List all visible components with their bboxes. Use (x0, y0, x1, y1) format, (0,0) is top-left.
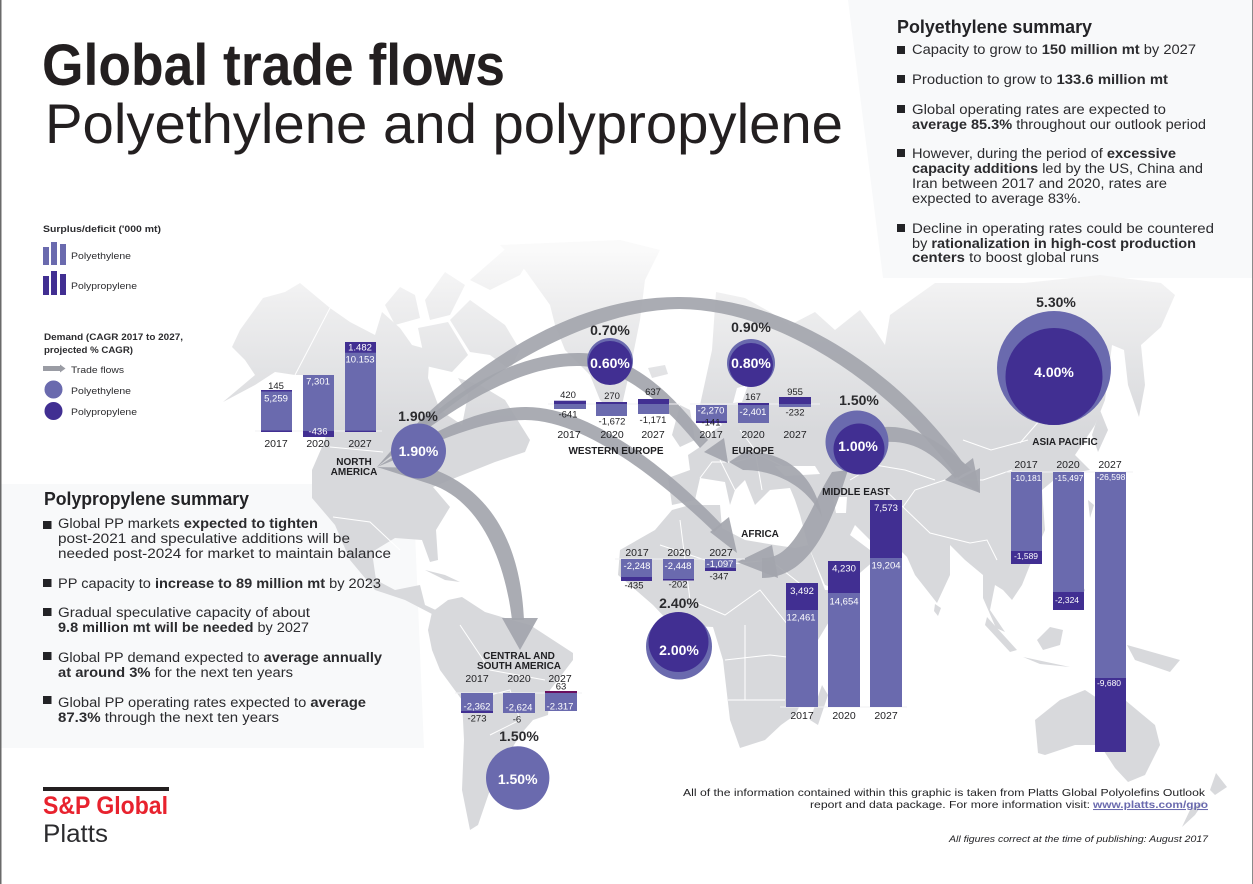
legend: Polypropylene (71, 407, 137, 418)
panel: polyethylene summary: centers to boost global runs (912, 250, 1099, 265)
bar chart: Africa: 2020 (667, 547, 691, 559)
panel: polyethylene summary: by rationalization in high-cost production (912, 236, 1196, 251)
circle: Europe demand: 0.80% (731, 355, 771, 371)
bar chart: Central and South America: 2020 (507, 673, 531, 685)
circle: North America demand: 1.90% (399, 443, 439, 459)
bar chart: Western Europe: 2017 (557, 429, 581, 441)
title: Polyethylene and polypropylene (45, 92, 843, 155)
legend: Surplus/deficit ('000 mt) (43, 224, 161, 235)
circle: Middle East demand: 1.00% (838, 438, 878, 454)
bar chart: Central and South America: SOUTH AMERICA (477, 661, 561, 672)
panel: polypropylene summary: Global PP operating rates expected to average (58, 695, 367, 710)
source note: All of the information contained within this graphic is taken from Platts Global Polyolefins Outlook (683, 787, 1206, 799)
bar chart: Asia Pacific: 2027 (1098, 459, 1122, 471)
bar chart: Western Europe (548, 387, 680, 457)
bar chart: Europe: 2020 (741, 429, 765, 441)
circle: Europe demand: 0.90% (731, 319, 771, 335)
source note: report and data package. For more information visit: (810, 799, 1090, 811)
legend: projected % CAGR) (44, 345, 133, 356)
panel: polypropylene summary: 9.8 million mt will be needed by 2027 (58, 620, 309, 635)
bar chart: Middle East: 2020 (832, 710, 856, 722)
bar chart: North America: AMERICA (331, 467, 377, 478)
bar chart: Africa: -347 (709, 572, 729, 582)
legend (43, 224, 183, 420)
bar chart: Africa: -2,448 (665, 561, 691, 572)
bar chart: Asia Pacific: -26,598 (1097, 472, 1126, 482)
circle: Western Europe demand: 0.70% (590, 322, 630, 338)
bar chart: Europe: -2,270 (698, 406, 724, 416)
circle: North America demand (391, 408, 446, 478)
bar chart: Europe: EUROPE (732, 446, 774, 457)
bar chart: Asia Pacific: -9,680 (1097, 678, 1121, 688)
logo: S&P Global Platts (43, 787, 169, 848)
world map (223, 240, 1227, 830)
legend: Polyethylene (71, 386, 131, 397)
bar chart: Middle East: 3,492 (790, 586, 814, 597)
bar chart: Central and South America: -273 (467, 714, 487, 724)
bar chart: North America: -436 (308, 426, 328, 438)
bar chart: Western Europe: 2020 (600, 429, 624, 441)
bar chart: Middle East: 2027 (874, 710, 898, 722)
circle: Middle East demand (826, 392, 888, 474)
bar chart: Europe (690, 387, 820, 457)
bar chart: Middle East: 7,573 (874, 503, 898, 514)
circle: Central and South America demand: 1.50% (499, 728, 539, 744)
bar chart: Middle East: 12,461 (786, 612, 816, 624)
circle: Central and South America demand: 1.50% (498, 771, 538, 787)
bar chart: Western Europe: -1,672 (599, 416, 625, 428)
panel: polypropylene summary: Global PP markets expected to tighten (58, 516, 318, 531)
bar chart: Central and South America: -2,362 (464, 702, 490, 712)
bar chart: North America: NORTH (336, 457, 372, 468)
panel: polypropylene summary: Gradual speculative capacity of about (58, 605, 310, 620)
bar chart: North America: 5,259 (264, 394, 288, 404)
panel: polyethylene summary: expected to average 83%. (912, 191, 1081, 206)
bar chart: Middle East: 14,654 (829, 596, 859, 608)
panel: polypropylene summary: PP capacity to increase to 89 million mt by 2023 (58, 576, 381, 591)
bar chart: Asia Pacific: ASIA PACIFIC (1032, 437, 1098, 448)
bar chart: Central and South America: -2.317 (547, 702, 573, 712)
bar chart: Asia Pacific: 2017 (1014, 459, 1038, 471)
trade flow arrows (377, 297, 980, 650)
panel: polypropylene summary: Global PP demand expected to average annually (58, 650, 383, 665)
panel: polyethylene summary: Polyethylene summary (897, 17, 1092, 37)
panel: polyethylene summary: average 85.3% throughout our outlook period (912, 117, 1206, 132)
bar chart: Europe: -232 (785, 408, 805, 418)
bar chart: Africa: -435 (624, 580, 644, 592)
bar chart: Asia Pacific: -1,589 (1014, 551, 1038, 561)
panel: polyethylene summary (897, 17, 1214, 265)
circle: North America demand: 1.90% (398, 408, 438, 424)
panel: polyethylene summary: Global operating rates are expected to (912, 102, 1166, 117)
circle: Asia Pacific demand: 4.00% (1034, 364, 1074, 380)
bar chart: Western Europe: -641 (558, 410, 578, 420)
bar chart: Central and South America: 2027 (548, 673, 572, 685)
legend: Polypropylene (71, 281, 137, 292)
bar chart: Western Europe: 637 (645, 387, 661, 398)
bar chart: North America: 145 (268, 381, 284, 392)
bar chart: Europe: -141 (701, 418, 721, 428)
circle: Central and South America demand (486, 728, 549, 810)
bar chart: Asia Pacific: 2020 (1056, 459, 1080, 471)
circle: Europe demand (727, 319, 775, 387)
logo: S&P Global Platts: Platts (43, 820, 108, 848)
bar chart: Western Europe: -1,171 (640, 415, 666, 426)
source note: All figures correct at the time of publishing: August 2017 (948, 834, 1209, 845)
bar chart: North America: 2020 (306, 438, 330, 450)
circle: Western Europe demand (587, 322, 633, 385)
bar chart: Africa: -2,248 (624, 561, 650, 572)
panel: polypropylene summary: needed post-2024 for market to maintain balance (58, 546, 391, 561)
panel background: polyethylene summary (848, 0, 1252, 278)
bar chart: Asia Pacific: -15,497 (1055, 473, 1084, 483)
bar chart: Western Europe: 2027 (641, 429, 665, 441)
bar chart: Europe: 955 (787, 387, 803, 398)
bar chart: Middle East: 4,230 (832, 564, 856, 574)
circle: Middle East demand: 1.50% (839, 392, 879, 408)
bar chart: Middle East: 19,204 (871, 560, 901, 572)
bar chart: Middle East: MIDDLE EAST (822, 487, 890, 498)
bar chart: Africa: -202 (668, 580, 688, 590)
bar chart: North America (255, 342, 382, 478)
bar chart: Europe: 167 (745, 392, 761, 403)
bar chart: North America: 10.153 (345, 354, 375, 366)
bar chart: North America: 1.482 (348, 342, 372, 354)
circle: Western Europe demand: 0.60% (590, 355, 630, 371)
bar chart: North America: 2017 (264, 438, 288, 450)
bar chart: Middle East: 2017 (790, 710, 814, 722)
panel: polyethylene summary: Production to grow to 133.6 million mt (912, 72, 1169, 87)
bar chart: Western Europe: 420 (560, 390, 576, 401)
panel: polyethylene summary: Iran between 2017 and 2020, rates are (912, 176, 1167, 191)
panel background: polypropylene summary (2, 484, 424, 748)
logo: S&P Global Platts: S&P Global (43, 792, 168, 820)
bar chart: Middle East (780, 487, 907, 722)
bar chart: Central and South America: CENTRAL AND (483, 651, 555, 662)
title (42, 33, 843, 155)
bar chart: Africa: AFRICA (741, 529, 779, 540)
panel: polypropylene summary (43, 489, 391, 725)
circle: Africa demand: 2.00% (659, 642, 699, 658)
panel: polyethylene summary: Decline in operating rates could be countered (912, 221, 1214, 236)
bar chart: Europe: 2027 (783, 429, 807, 441)
panel: polyethylene summary: However, during the period of excessive (912, 146, 1177, 161)
bar chart: Africa: 2017 (625, 547, 649, 559)
bar chart: Central and South America: 2017 (465, 673, 489, 685)
bar chart: Western Europe: 270 (604, 391, 620, 402)
bar chart: Africa (615, 529, 779, 592)
bar chart: Africa: 2027 (709, 547, 733, 559)
circle: Asia Pacific demand: 5.30% (1036, 294, 1076, 310)
title: Global trade flows (42, 33, 505, 98)
legend: Demand (CAGR 2017 to 2027, (44, 332, 183, 343)
panel: polyethylene summary: capacity additions led by the US, China and (912, 161, 1203, 176)
bar chart: North America: 2027 (348, 438, 372, 450)
circle: Africa demand (646, 595, 712, 680)
bar chart: Europe: -2,401 (740, 407, 766, 418)
bar chart: Central and South America: -6 (513, 714, 521, 726)
source note (683, 787, 1209, 845)
bar chart: Central and South America (455, 651, 582, 726)
bar chart: Europe: 2017 (699, 429, 723, 441)
bar chart: Asia Pacific: -2,324 (1055, 595, 1079, 605)
panel: polypropylene summary: 87.3% through the next ten years (58, 710, 279, 725)
panel: polypropylene summary: at around 3% for the next ten years (58, 665, 293, 680)
bar chart: Asia Pacific (1005, 437, 1133, 752)
panel: polypropylene summary: post-2021 and speculative additions will be (58, 531, 350, 546)
panel: polyethylene summary: Capacity to grow to 150 million mt by 2027 (912, 42, 1196, 57)
source note: www.platts.com/gpo (1092, 799, 1208, 811)
bar chart: North America: 7,301 (306, 376, 330, 388)
legend: Polyethylene (71, 251, 131, 262)
bar chart: Central and South America: -2,624 (506, 702, 532, 714)
bar chart: Asia Pacific: -10,181 (1013, 473, 1042, 483)
bar chart: Africa: -1,097 (707, 559, 733, 570)
legend: Trade flows (71, 365, 124, 376)
circle: Africa demand: 2.40% (659, 595, 699, 611)
bar chart: Western Europe: WESTERN EUROPE (568, 446, 664, 457)
panel: polypropylene summary: Polypropylene summary (44, 489, 249, 509)
circle: Asia Pacific demand (997, 294, 1111, 425)
bar chart: Central and South America: 63 (556, 682, 566, 692)
